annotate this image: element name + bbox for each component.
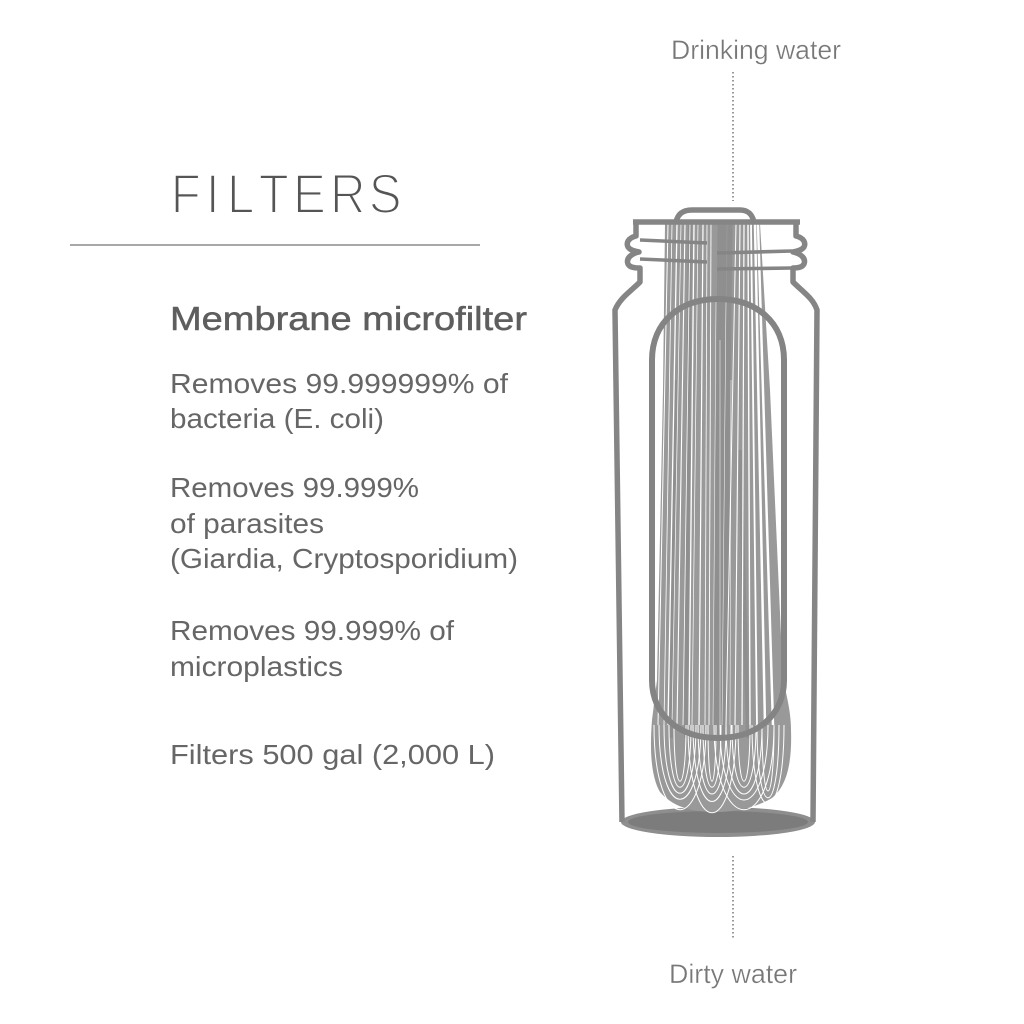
bottle outline — [615, 210, 817, 822]
title: FILTERS — [171, 163, 402, 226]
bottle base — [621, 807, 815, 837]
parasites removal text — [170, 472, 518, 574]
icon: filter bottle — [615, 210, 817, 837]
screw thread lines — [640, 240, 792, 269]
filament loops — [654, 725, 784, 813]
bacteria removal text: Removes 99.999999% of — [170, 368, 508, 399]
arrow: drinking water dotted line — [732, 72, 734, 201]
microplastics removal text — [170, 615, 454, 682]
parasites removal text: (Giardia, Cryptosporidium) — [170, 543, 518, 574]
hollow fiber filaments — [651, 224, 791, 813]
subheading: Membrane microfilter — [170, 300, 527, 337]
arrow: dirty water dotted line — [732, 856, 734, 938]
label: dirty water: Dirty water — [669, 959, 797, 989]
inner capsule — [652, 299, 784, 738]
microplastics removal text: microplastics — [170, 651, 343, 682]
bacteria removal text: bacteria (E. coli) — [170, 403, 384, 434]
parasites removal text: of parasites — [170, 508, 324, 539]
parasites removal text: Removes 99.999% — [170, 472, 419, 503]
filter capacity text: Filters 500 gal (2,000 L) — [170, 739, 495, 770]
bacteria removal text — [170, 368, 508, 434]
microplastics removal text: Removes 99.999% of — [170, 615, 454, 646]
label: drinking water: Drinking water — [671, 35, 841, 65]
text block: product details — [170, 300, 527, 770]
